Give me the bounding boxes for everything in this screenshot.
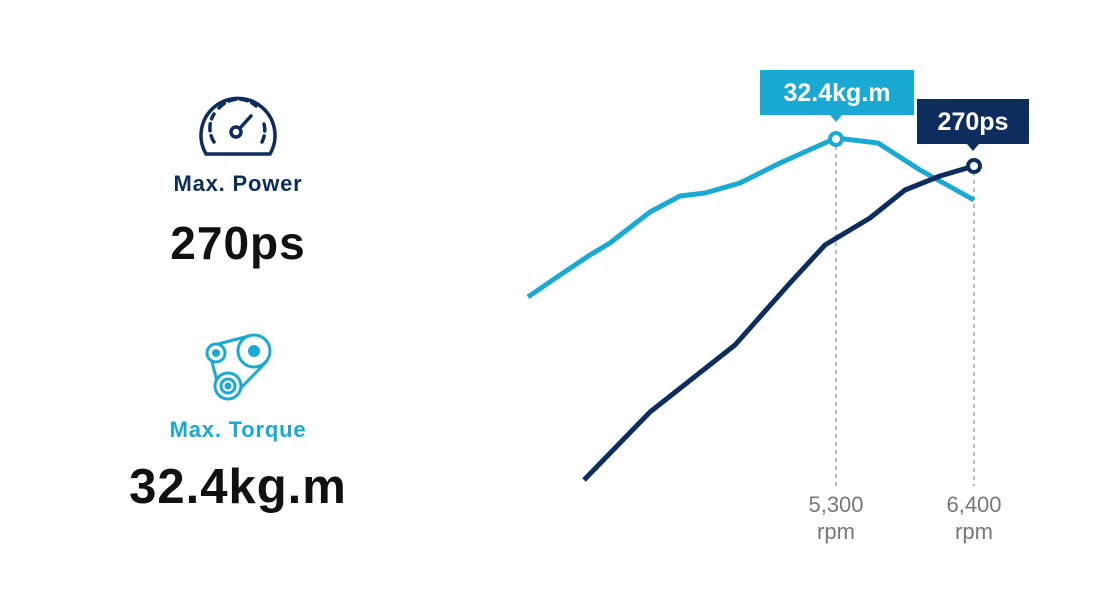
icon: pulleys	[206, 334, 272, 400]
value: torque: 32.4kg.m	[129, 460, 347, 514]
label: max power: Max. Power	[173, 171, 303, 196]
value: power: 270ps	[170, 217, 306, 269]
callout: torque: 32.4kg.m	[783, 79, 891, 107]
axis labels	[808, 492, 1002, 544]
axis labels: 6,400	[946, 492, 1002, 517]
power curve	[584, 166, 974, 480]
axis labels: 5,300	[808, 492, 864, 517]
axis labels: rpm	[955, 519, 993, 544]
callout: power	[917, 99, 1029, 151]
callout: torque	[760, 70, 914, 122]
axis labels: rpm	[817, 519, 855, 544]
callout: power: 270ps	[938, 108, 1008, 136]
torque curve	[528, 138, 974, 297]
label: max torque: Max. Torque	[170, 417, 306, 442]
icon: speedometer	[199, 96, 277, 156]
